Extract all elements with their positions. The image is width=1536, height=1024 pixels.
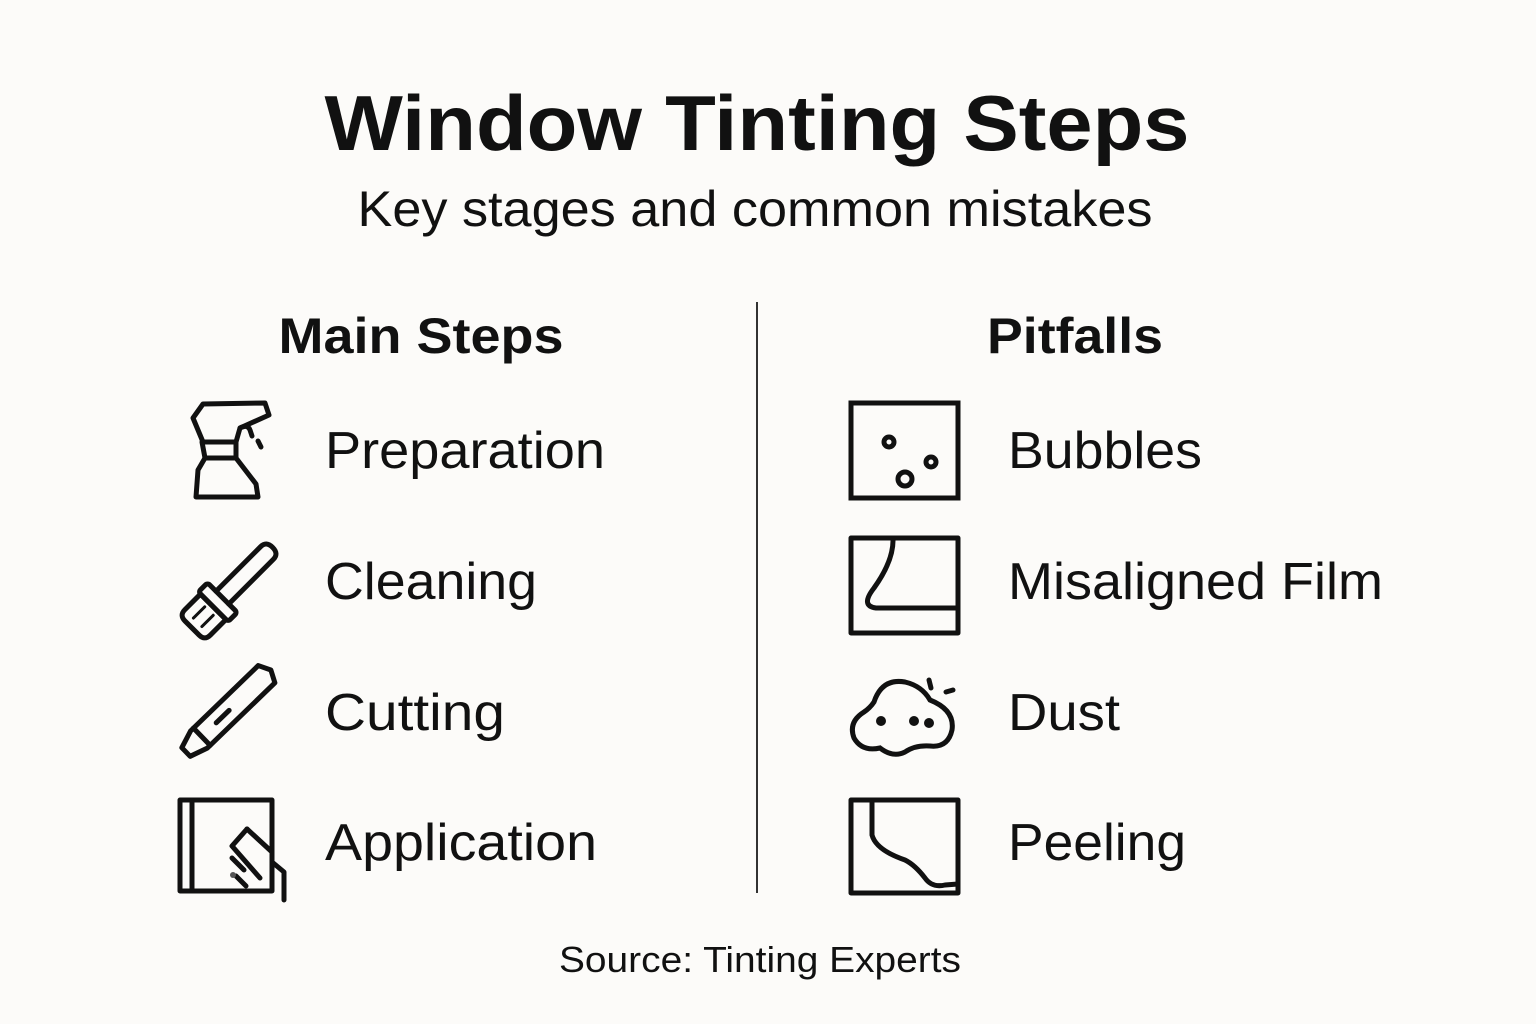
title: Window Tinting Steps (324, 79, 1190, 167)
text: dust: Dust (1008, 684, 1121, 742)
icon: cutter (178, 661, 279, 761)
text: application: Application (325, 814, 597, 872)
icon: bubbles (851, 403, 958, 498)
icon: brush (177, 533, 287, 643)
subtitle: Key stages and common mistakes (358, 181, 1152, 237)
icon: dust (852, 680, 953, 754)
icon: misaligned film (851, 538, 958, 633)
text: preparation: Preparation (325, 422, 605, 480)
icon: spray bottle (193, 403, 269, 497)
heading: pitfalls: Pitfalls (987, 308, 1163, 364)
heading: main steps: Main Steps (278, 308, 564, 364)
source: Source: Tinting Experts (559, 939, 961, 980)
text: peeling: Peeling (1008, 814, 1186, 872)
text: cutting: Cutting (325, 684, 505, 742)
text: misaligned film: Misaligned Film (1008, 553, 1383, 611)
icon: peeling (851, 800, 958, 893)
text: bubbles: Bubbles (1008, 422, 1202, 480)
text: cleaning: Cleaning (325, 553, 537, 611)
icon: application (180, 800, 284, 900)
